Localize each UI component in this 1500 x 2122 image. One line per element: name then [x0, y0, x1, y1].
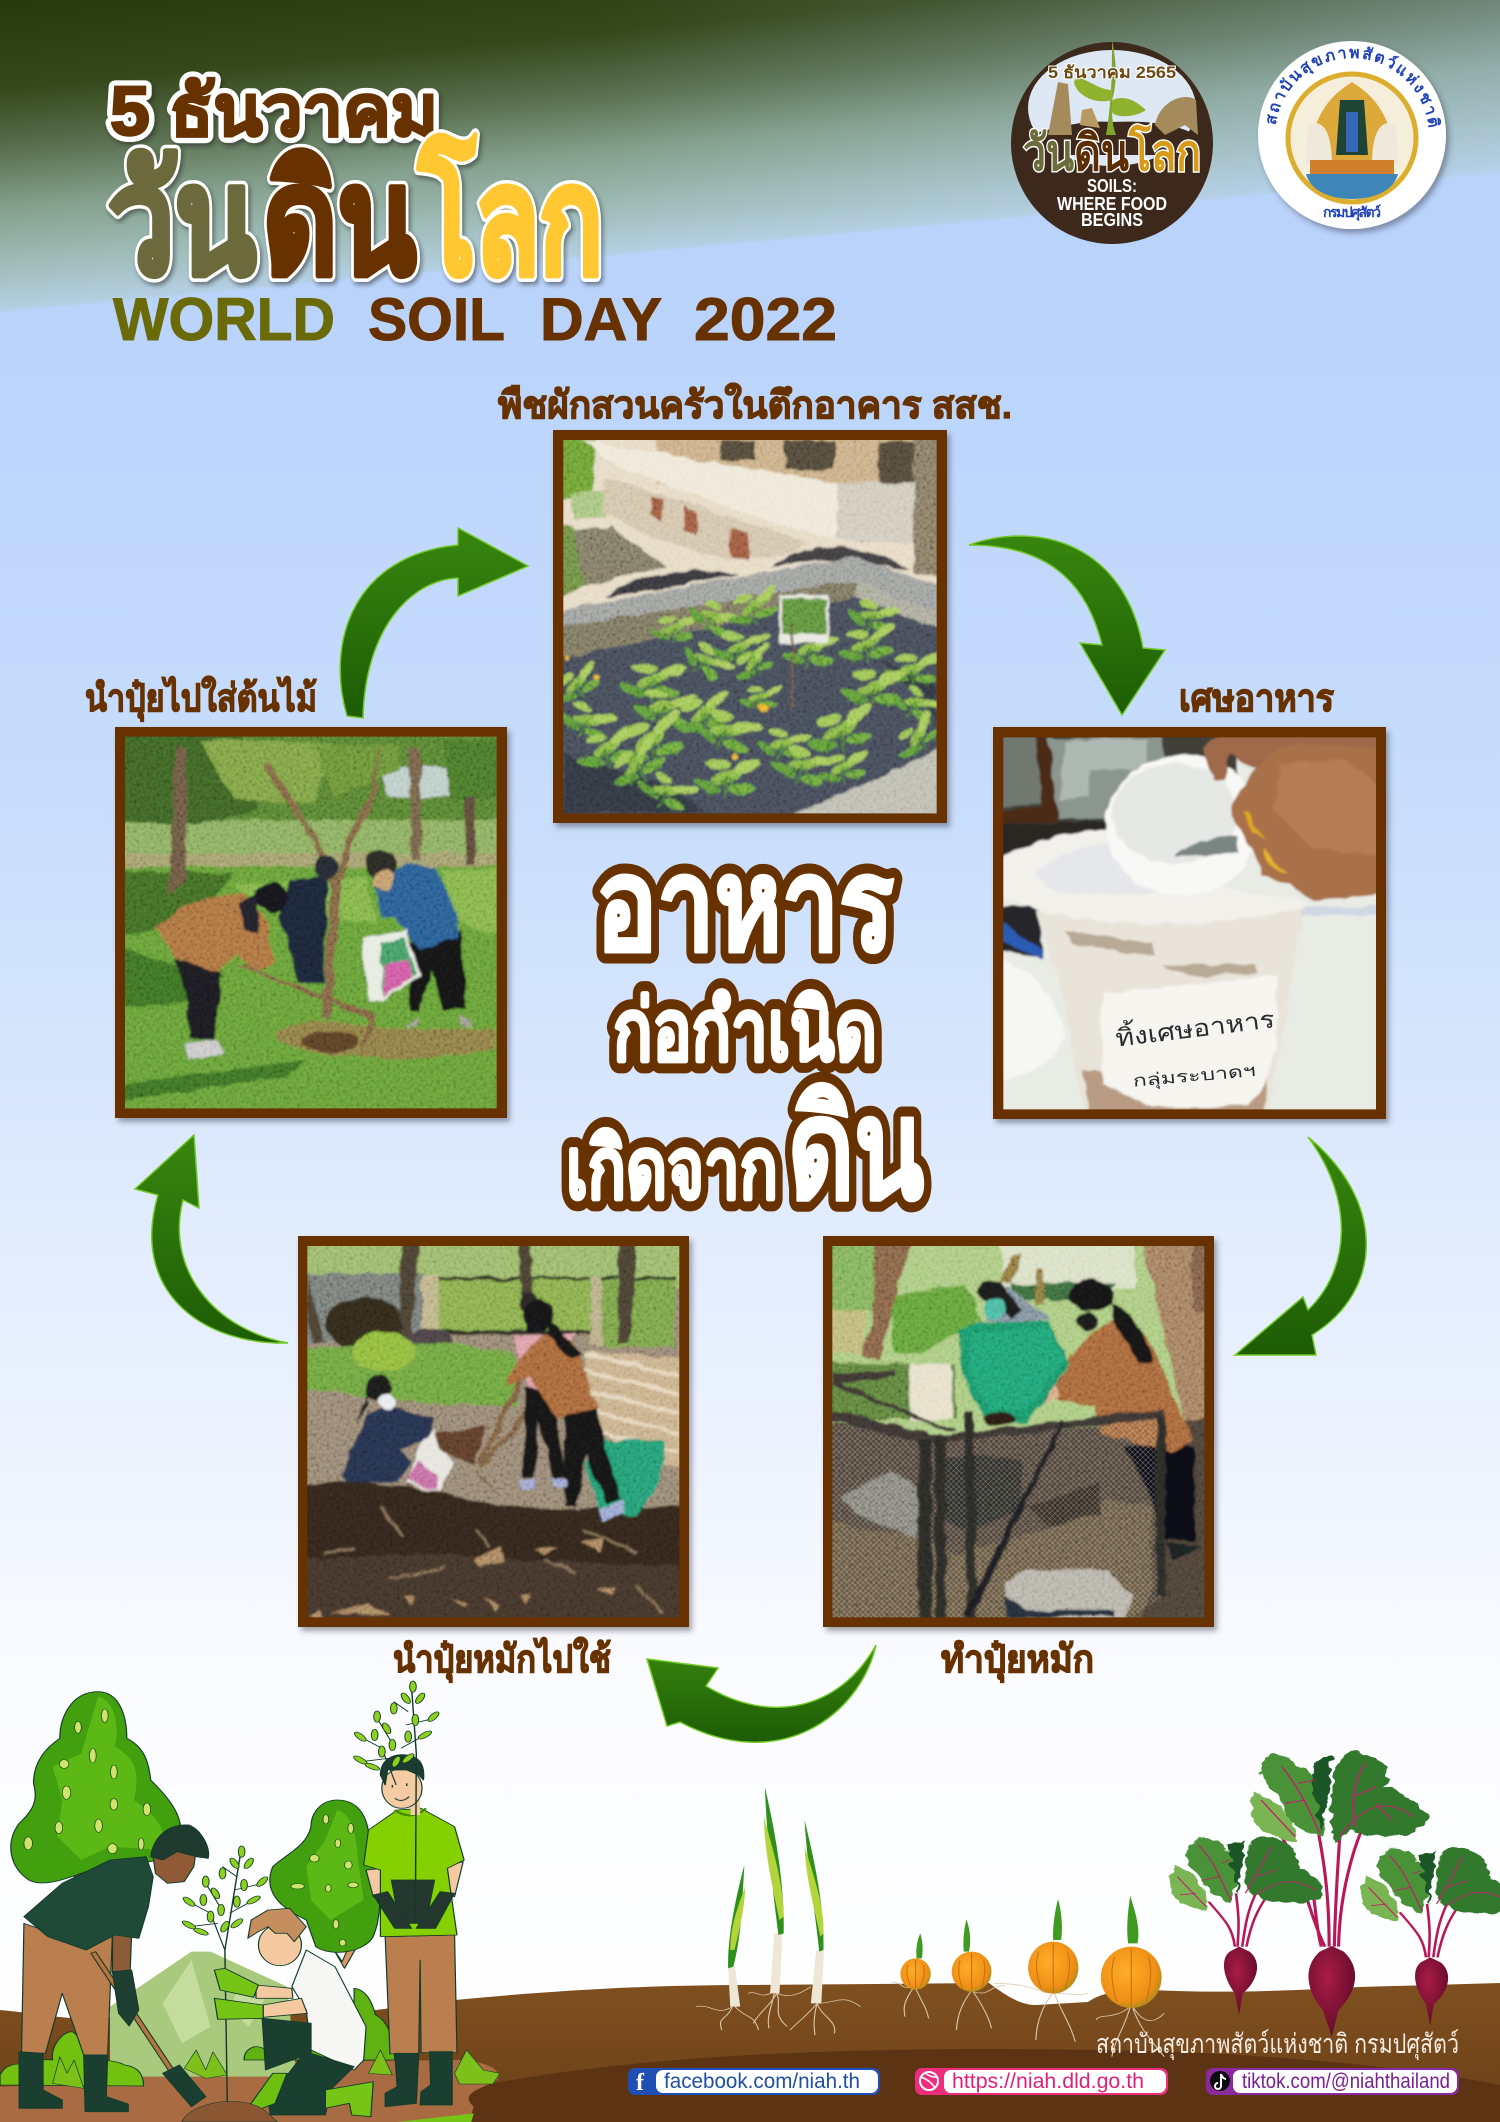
photo: spreading compost [290, 1220, 710, 1640]
arrow: tree to garden [340, 528, 528, 718]
roots of plants [696, 1982, 1164, 2057]
social: website [915, 2068, 1168, 2095]
center slogan: comes from soil: เกิดจาก [566, 1122, 778, 1217]
logo: World Soil Day [1011, 40, 1213, 244]
center slogan: comes from soil: ดิน [788, 1071, 924, 1228]
logo: World Soil Day: วันดินโลก [1023, 123, 1201, 181]
header: World Soil Day in Thai: โลก [418, 134, 603, 305]
header: World Soil Day 2022 [113, 286, 837, 353]
top green band [0, 0, 1500, 340]
caption: food waste: เศษอาหาร [1179, 678, 1335, 720]
logo: Department of Livestock seal: สถาบันสุขภาพสัตว์แห่งชาติ [1267, 46, 1442, 128]
social: facebook [628, 2068, 880, 2096]
center slogan: food: อาหาร [596, 832, 894, 978]
illustration: vegetables growing [696, 1752, 1500, 2057]
header: World Soil Day in Thai: โลก [418, 134, 603, 305]
logo: World Soil Day: WHERE FOOD [1057, 194, 1167, 214]
header: World Soil Day 2022: DAY [540, 286, 662, 353]
photo: people adding fertilizer to a tree [100, 710, 520, 1130]
logo: World Soil Day: 5 ธันวาคม 2565 [1048, 63, 1176, 82]
center slogan: origin of life: ก่อกำเนิด [613, 984, 877, 1079]
social: tiktok [1206, 2068, 1459, 2095]
header: World Soil Day in Thai: วัน [108, 137, 256, 305]
social: facebook: f [636, 2070, 645, 2096]
center slogan: comes from soil: เกิดจาก [566, 1122, 778, 1217]
illustration: people planting trees [0, 1681, 500, 2122]
caption: kitchen garden: พืชผักสวนครัวในตึกอาคาร สสช. [498, 383, 1012, 427]
center slogan: comes from soil [566, 1071, 924, 1228]
header: World Soil Day 2022: SOIL [368, 286, 505, 353]
caption: make compost: ทำปุ๋ยหมัก [941, 1639, 1094, 1683]
caption: use compost: นำปุ๋ยหมักไปใช้ [393, 1637, 611, 1683]
logo: World Soil Day: BEGINS [1081, 210, 1143, 230]
header: World Soil Day in Thai: ดิน [263, 137, 416, 305]
photo: pouring food waste into a bucket [980, 710, 1400, 1130]
logo: Department of Livestock seal [1258, 41, 1452, 236]
header: World Soil Day in Thai: วัน [108, 137, 256, 305]
photo: making compost in a cage [815, 1220, 1235, 1640]
social: website: https://niah.dld.go.th [952, 2070, 1144, 2093]
center slogan: comes from soil: ดิน [788, 1071, 924, 1228]
header: World Soil Day in Thai [108, 134, 603, 305]
header: World Soil Day 2022: 2022 [694, 286, 837, 353]
caption: apply fertilizer to trees: นำปุ๋ยไปใส่ต้นไม้ [85, 676, 317, 722]
beetroots [1170, 1752, 1500, 2037]
header: World Soil Day in Thai: ดิน [263, 137, 416, 305]
onions [900, 1896, 1162, 2008]
social: facebook: facebook.com/niah.th [664, 2070, 860, 2093]
center slogan: origin of life: ก่อกำเนิด [613, 984, 877, 1079]
photo: pouring food waste into a bucket: ทิ้งเศษอาหาร [1113, 1001, 1276, 1053]
header: 5 December: 5 ธันวาคม [110, 72, 438, 150]
arrow: garden to food waste [969, 536, 1165, 715]
logo: Department of Livestock seal: กรมปศุสัตว์ [1323, 204, 1381, 221]
center slogan: food: อาหาร [596, 832, 894, 978]
photo: kitchen garden on building [540, 420, 960, 840]
photo: pouring food waste into a bucket: กลุ่มระบาดฯ [1132, 1061, 1257, 1092]
logo: World Soil Day: SOILS: [1087, 176, 1137, 196]
header: 5 December: 5 ธันวาคม [110, 72, 438, 150]
spring onions [728, 1787, 824, 2007]
ground [0, 1983, 1500, 2122]
arrow: food waste to compost [1235, 1137, 1366, 1355]
arrow: compost to use [647, 1645, 876, 1742]
social: tiktok: tiktok.com/@niahthailand [1242, 2070, 1450, 2093]
arrow: use to tree [135, 1135, 288, 1343]
header: World Soil Day 2022: WORLD [113, 286, 335, 353]
